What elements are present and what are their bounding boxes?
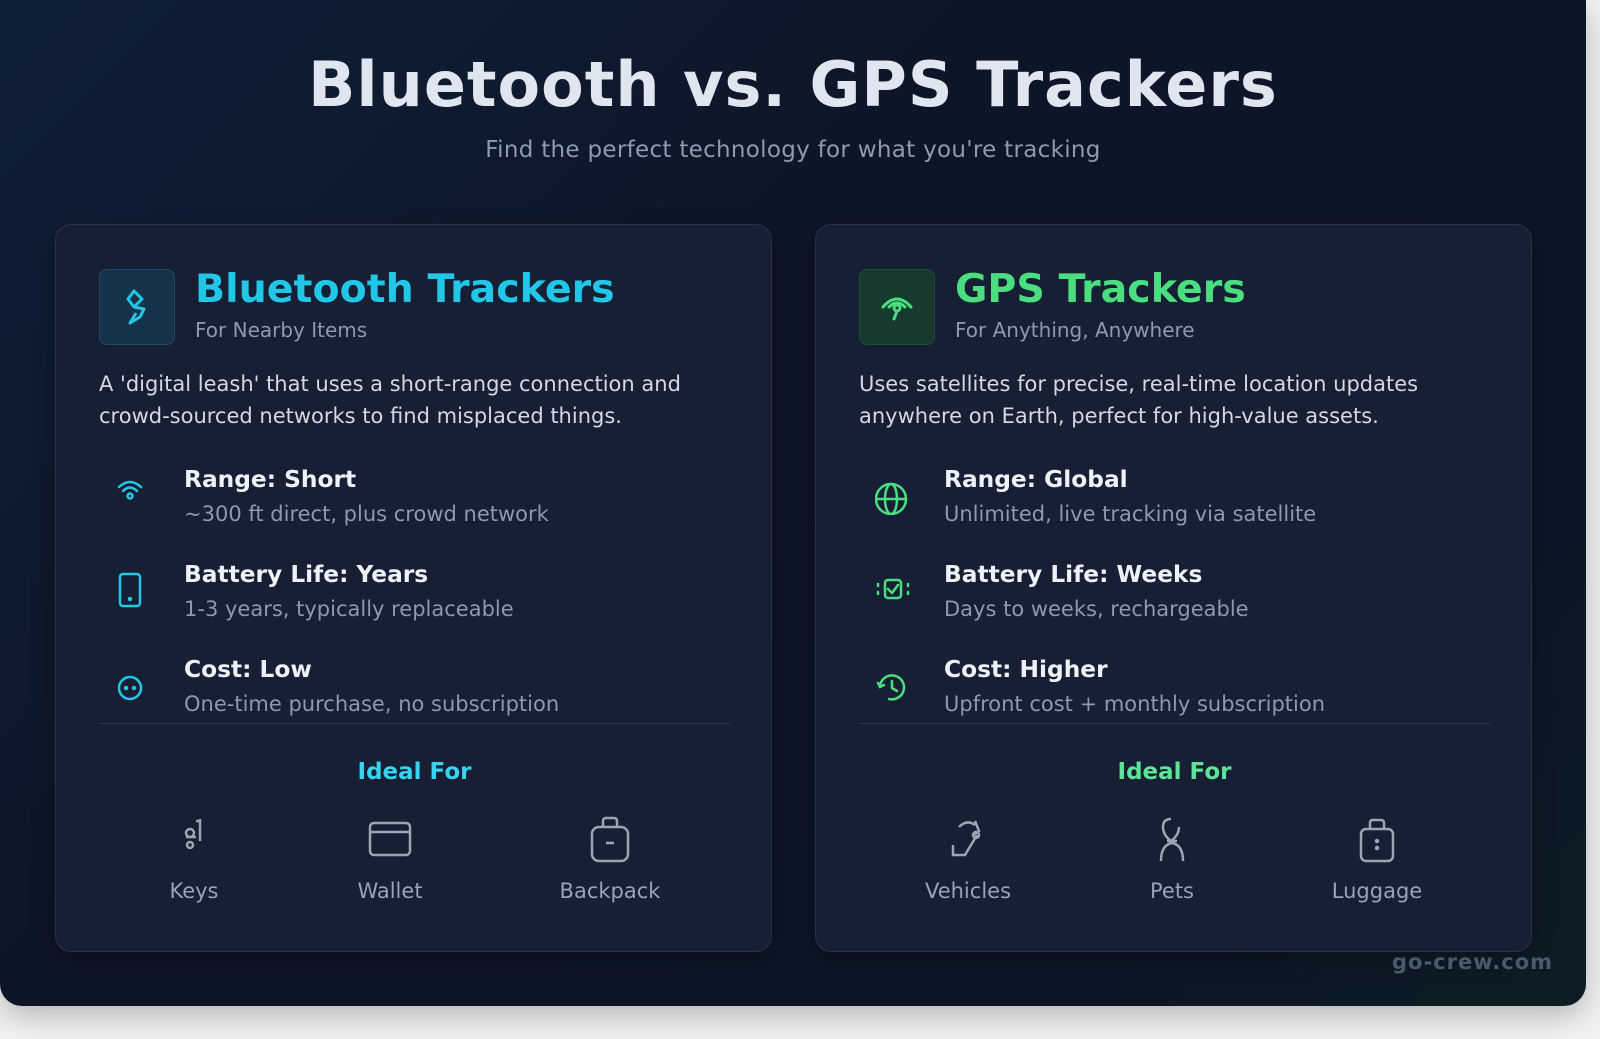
subheading: For Anything, Anywhere [955,318,1195,342]
item: vehicles: Vehicles [925,879,1011,903]
feature: cost: Upfront cost + monthly subscription [944,692,1325,716]
item: wallet: Wallet [357,879,423,903]
item: keys: Keys [169,879,218,903]
description: Uses satellites for precise, real-time location updates anywhere on Earth, perfect for high-value assets. [859,372,1418,428]
feature: cost [876,656,1325,716]
subtitle: Find the perfect technology for what you're tracking [485,137,1101,163]
ideal for heading: Ideal For [358,759,471,785]
icon: bluetooth [99,269,175,345]
heading: GPS Trackers [955,266,1246,312]
item: pets: Pets [1150,879,1194,903]
feature: battery: Days to weeks, rechargeable [944,597,1249,621]
feature: range: Range: Short [184,466,356,493]
item: pets [1150,818,1194,903]
feature: battery [876,561,1249,621]
feature: range: ~300 ft direct, plus crowd network [184,502,549,526]
feature: battery: Battery Life: Years [184,561,428,588]
ideal for heading: Ideal For [1118,759,1231,785]
title: Bluetooth vs. GPS Trackers [308,48,1278,121]
feature: battery [118,561,514,621]
watermark: go-crew.com [1392,950,1553,974]
description: A 'digital leash' that uses a short-range connection and crowd-sourced networks to find misplaced things. [99,372,681,428]
feature: battery: 1-3 years, typically replaceable [184,597,514,621]
feature: cost [118,656,559,716]
item: backpack: Backpack [560,879,660,903]
item: backpack [560,816,660,903]
feature: cost: Cost: Higher [944,656,1108,683]
item: keys [169,819,218,903]
feature: cost: One-time purchase, no subscription [184,692,559,716]
item: vehicles [925,820,1011,903]
icon: gps [859,269,935,345]
panel: bluetooth [55,224,772,952]
item: wallet [357,822,423,903]
feature: range: Range: Global [944,466,1128,493]
heading: Bluetooth Trackers [195,266,615,312]
feature: battery: Battery Life: Weeks [944,561,1202,588]
panel: gps [815,224,1532,952]
feature: cost: Cost: Low [184,656,312,683]
feature: range: Unlimited, live tracking via satellite [944,502,1316,526]
item: luggage [1332,818,1422,903]
item: luggage: Luggage [1332,879,1422,903]
subheading: For Nearby Items [195,318,367,342]
feature: range [875,466,1316,526]
feature: range [118,466,549,526]
